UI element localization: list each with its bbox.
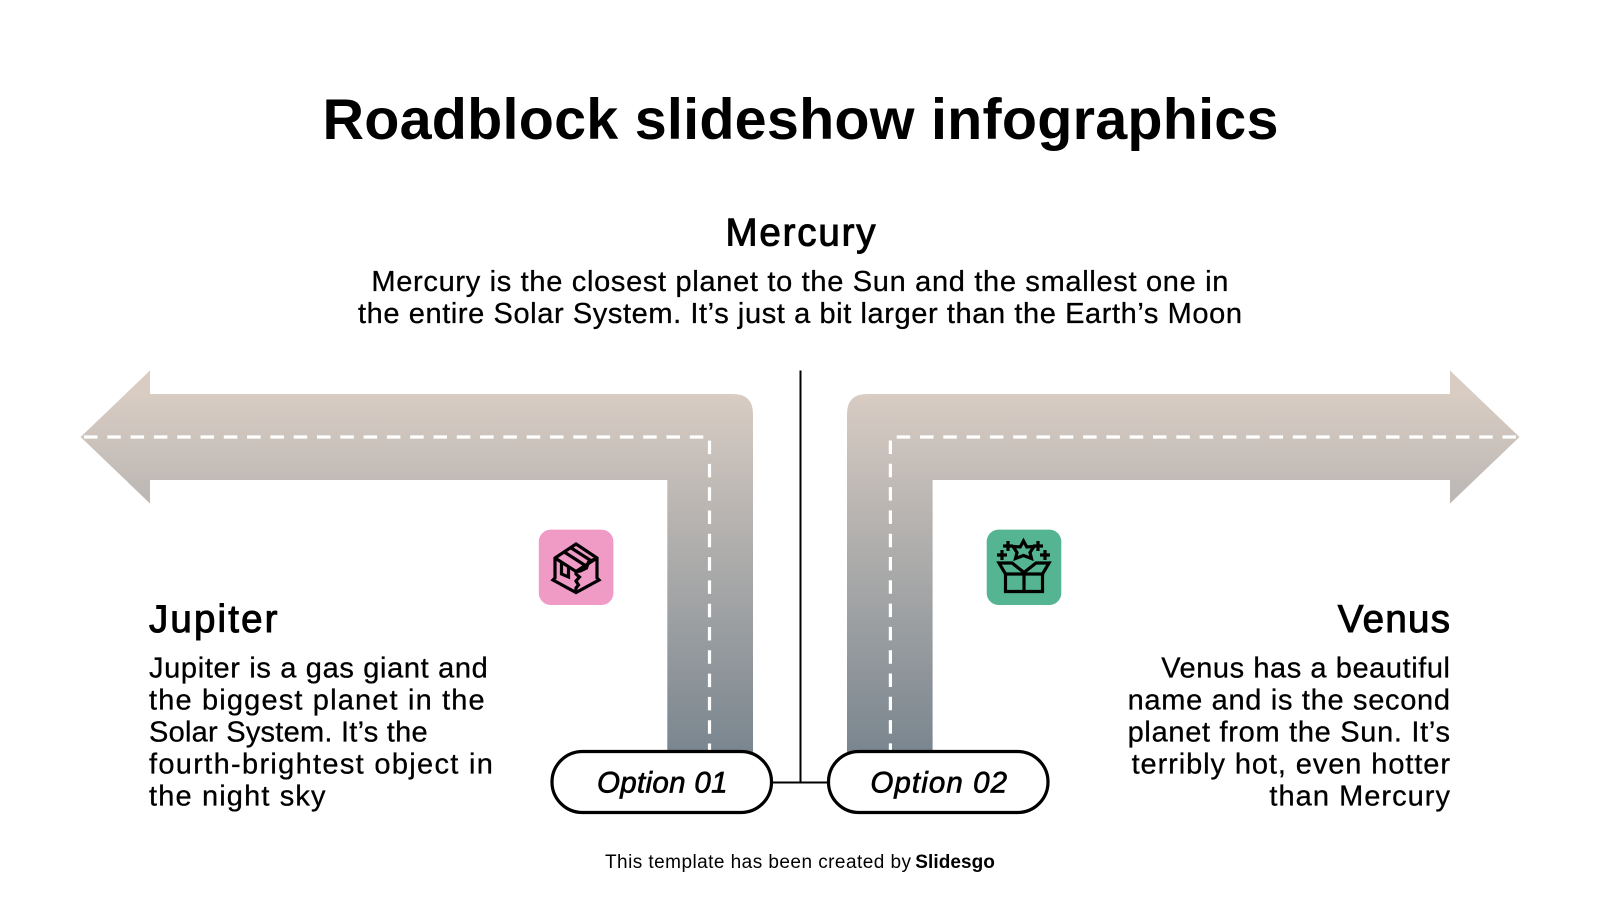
text block: Venus description: terribly hot, even hotter (1132, 748, 1450, 780)
icon: damaged box (539, 530, 613, 605)
panel: Mercury (358, 212, 1242, 330)
text block: Jupiter description: the biggest planet in the (149, 684, 485, 716)
panel: Venus (1128, 598, 1450, 812)
footer credit: Slidesgo (915, 852, 995, 873)
text block: Jupiter description: fourth-brightest object in (149, 748, 493, 780)
text block: Jupiter description (149, 652, 493, 812)
option 02 pill: Option 02 (870, 766, 1007, 800)
text block: Venus description: planet from the Sun. It’s (1128, 716, 1450, 748)
heading: Mercury: Mercury (726, 212, 876, 254)
option 02 pill (828, 752, 1048, 812)
text block: Mercury description: Mercury is the closest planet to the Sun and the smallest one in (371, 266, 1228, 298)
heading: Venus: Venus (1338, 598, 1450, 641)
text block: Venus description (1128, 652, 1450, 812)
title: Roadblock slideshow infographics (322, 88, 1278, 152)
text block: Jupiter description: Jupiter is a gas giant and (149, 652, 488, 684)
text block: Mercury description: the entire Solar System. It’s just a bit larger than the Earth’s Moon (358, 298, 1242, 330)
heading: Jupiter: Jupiter (149, 598, 278, 641)
left road arrow (81, 370, 753, 752)
text block: Mercury description (358, 266, 1242, 330)
option 01 pill: Option 01 (597, 766, 728, 800)
option 01 pill (552, 752, 772, 812)
footer credit: This template has been created by (605, 852, 912, 873)
right road arrow (847, 370, 1520, 752)
panel: Jupiter (149, 598, 493, 812)
text block: Venus description: name and is the second (1128, 684, 1450, 716)
text block: Jupiter description: Solar System. It’s the (149, 716, 428, 748)
connector lines (772, 370, 828, 782)
text block: Venus description: Venus has a beautiful (1161, 652, 1450, 684)
icon: gift box (987, 530, 1061, 605)
text block: Jupiter description: the night sky (149, 780, 326, 812)
text block: Venus description: than Mercury (1269, 780, 1450, 812)
